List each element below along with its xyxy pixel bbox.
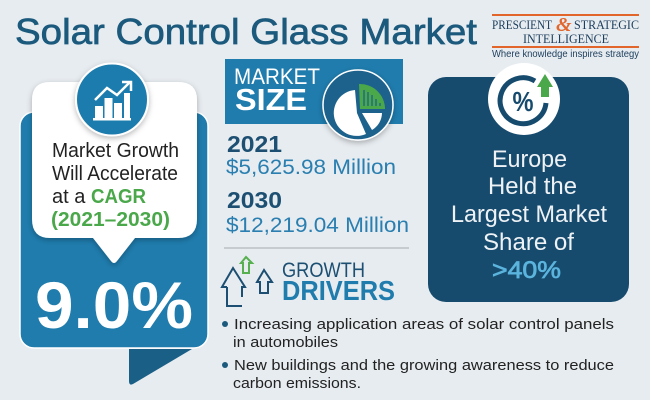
callout text: CAGR [91, 186, 147, 208]
logo: Prescient & Strategic Intelligence: & [556, 14, 572, 36]
share text: Europe [492, 146, 567, 173]
blue panel [20, 112, 208, 348]
growth drivers heading: GROWTH [282, 259, 365, 282]
white callout card [32, 82, 197, 263]
icon: arrows [222, 257, 272, 306]
logo: Prescient & Strategic Intelligence: INTELLIGENCE [523, 32, 609, 46]
panel: market growth [20, 64, 208, 385]
panel: market size banner: MARKET [234, 64, 320, 89]
bullet list: New buildings and the growing awareness to reduce [234, 357, 614, 374]
bullet list: carbon emissions. [233, 375, 361, 392]
panel: Europe share [428, 63, 629, 302]
callout text: at a [52, 186, 91, 208]
market size figures: 2021 [227, 131, 282, 157]
bullet list: Increasing application areas of solar control panels [234, 316, 614, 333]
bullet list: in automobiles [233, 334, 338, 351]
title: Solar Control Glass Market [15, 11, 477, 52]
share text: Largest Market [451, 201, 607, 228]
big number: 9.0% [35, 268, 193, 342]
market size figures: $12,219.04 Million [226, 214, 409, 237]
panel: market size banner: SIZE [235, 82, 307, 117]
logo: Prescient & Strategic Intelligence: STRATEGIC [574, 18, 639, 32]
icon: percent with arrow: % [512, 86, 534, 117]
market size figures: 2030 [227, 187, 282, 213]
share text [451, 146, 607, 284]
share text: Held the [488, 173, 577, 200]
market size figures: $5,625.98 Million [226, 156, 396, 179]
share text: Share of [483, 229, 574, 256]
logo: Prescient & Strategic Intelligence: PRESCIENT [492, 18, 552, 32]
icon: pie chart [323, 70, 393, 140]
callout text: Will Accelerate [52, 163, 178, 185]
market size figures [226, 131, 409, 237]
icon: growth chart [76, 64, 148, 136]
share text: >40% [492, 257, 561, 284]
panel: market size banner [225, 59, 403, 140]
icon: percent with arrow [488, 63, 560, 135]
growth drivers heading: DRIVERS [282, 275, 395, 306]
callout text: Market Growth [52, 140, 179, 162]
growth drivers heading [222, 257, 395, 306]
ribbon tail [129, 349, 192, 385]
bullet list [222, 316, 614, 392]
logo: Prescient & Strategic Intelligence [492, 14, 640, 60]
callout text: (2021–2030) [51, 209, 170, 231]
